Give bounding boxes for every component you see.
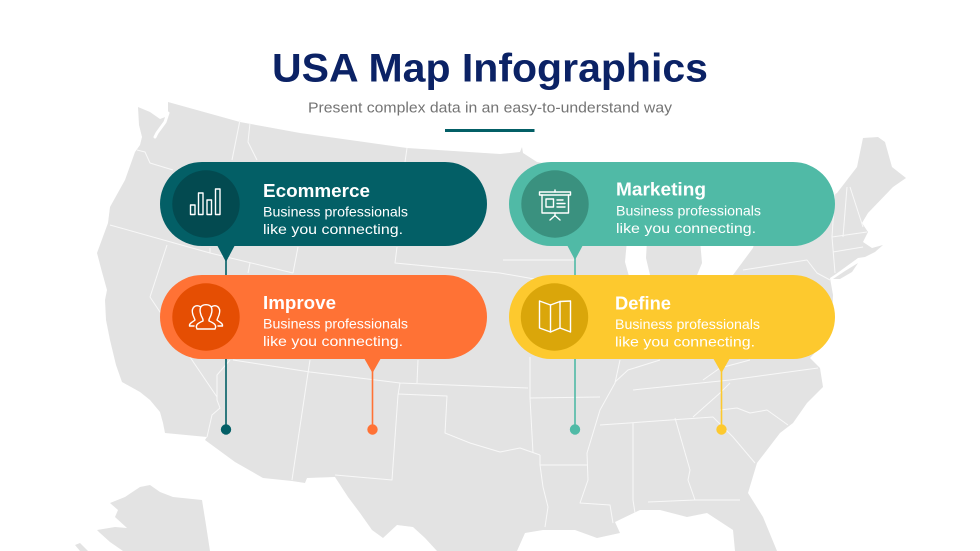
text: ecommerce description: like you connecting.: [263, 221, 403, 237]
map: USA silhouette with state borders: [75, 102, 906, 551]
text: define description: Business professionals: [615, 316, 760, 332]
connector: define pointer and pin: [713, 358, 730, 435]
connector: ecommerce pointer and pin: [217, 245, 235, 435]
panel: marketing: [509, 162, 835, 246]
text: marketing description: [616, 202, 761, 236]
text: define description: [615, 316, 760, 350]
icon: bar chart: [190, 189, 220, 214]
text: improve description: like you connecting.: [263, 333, 403, 349]
panel: ecommerce: [160, 162, 487, 246]
panel: improve: [160, 275, 487, 359]
icon: presentation board: [540, 190, 570, 220]
text: improve description: [263, 316, 408, 349]
connector: improve pointer and pin: [364, 358, 381, 435]
text: marketing description: like you connecting.: [616, 220, 756, 236]
connector: marketing pointer and pin: [567, 245, 583, 435]
heading: define: Define: [615, 292, 671, 314]
text: improve description: Business professionals: [263, 316, 408, 332]
heading: improve: Improve: [263, 292, 336, 313]
title underline: [445, 129, 534, 132]
icon: folded map: [540, 301, 570, 332]
heading: ecommerce: Ecommerce: [263, 180, 370, 201]
text: marketing description: Business professionals: [616, 202, 761, 218]
title: USA Map Infographics: [272, 46, 708, 90]
text: ecommerce description: Business professionals: [263, 204, 408, 220]
text: define description: like you connecting.: [615, 334, 755, 350]
heading: marketing: Marketing: [616, 178, 706, 200]
subtitle: Present complex data in an easy-to-understand way: [308, 100, 673, 116]
icon: group of people: [189, 305, 223, 329]
text: ecommerce description: [263, 204, 408, 237]
panel: define: [509, 275, 835, 359]
